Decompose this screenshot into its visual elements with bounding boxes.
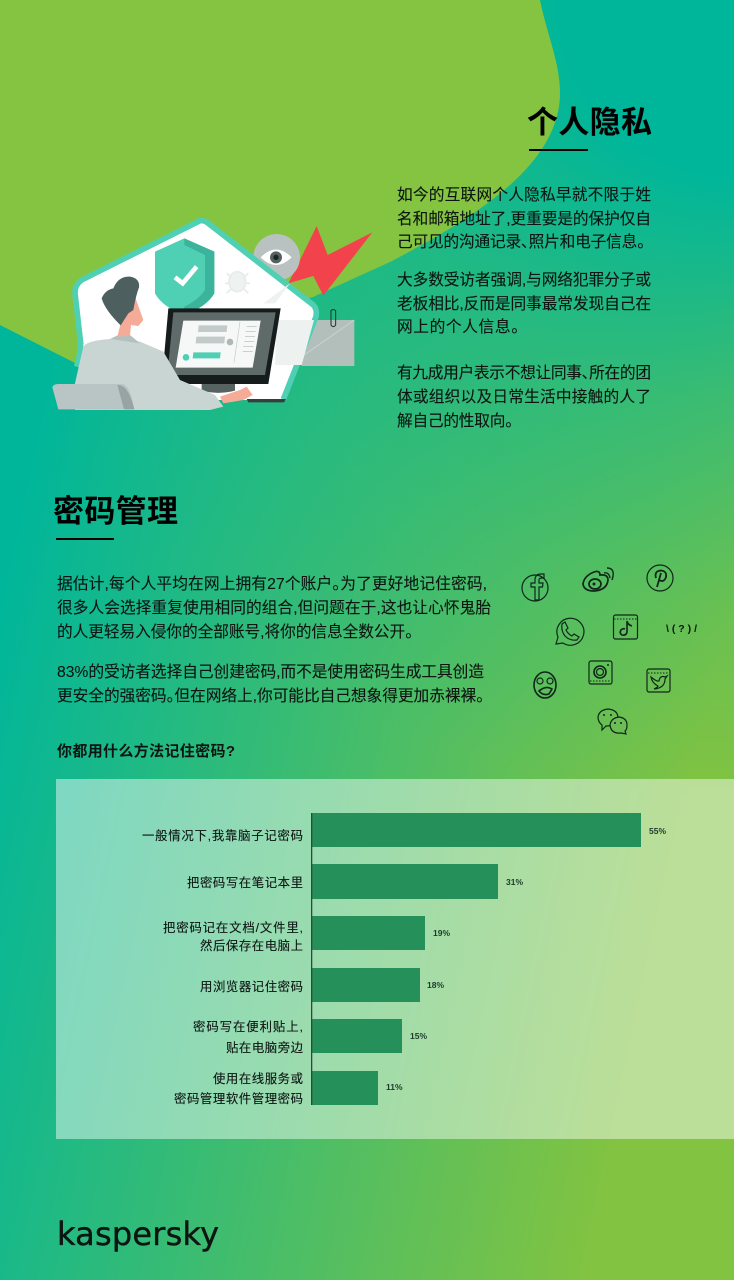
bar: brain 55%: 55% [649,826,666,836]
text block: password paragraphs: 的人更轻易入侵你的全部账号,将你的信息全数公开。 [57,623,413,641]
bar: sticky notes 15% [193,1019,427,1055]
icon: facebook [522,574,548,601]
bar: documents 19% [163,916,450,953]
bar: password manager 11%: 使用在线服务或 [213,1071,303,1086]
bar: browser 18% [200,968,444,1002]
text block: privacy paragraphs: 己可见的沟通记录、照片和电子信息。 [397,233,645,251]
panel: bar chart [56,779,734,1139]
bar: brain 55%: 一般情况下,我靠脑子记密码 [142,828,303,843]
text block: password paragraphs: 据估计,每个人平均在网上拥有27个账户。为了更好地记住密码, [57,575,487,593]
bar: sticky notes 15%: 15% [410,1031,427,1041]
person [75,277,286,410]
icon: wechat [598,709,627,734]
bar: notebook 31%: 把密码写在笔记本里 [187,875,303,890]
text block: privacy paragraphs: 解自己的性取向。 [397,412,513,430]
pentagon shield frame [75,221,316,400]
bar: notebook 31%: 31% [506,877,523,887]
text block: privacy paragraphs: 网上的个人信息。 [397,318,519,336]
social media icons [522,565,697,734]
bar: password manager 11%: 密码管理软件管理密码 [174,1091,303,1106]
logo: kaspersky: kaspersky [57,1215,219,1253]
faint bug icon [225,272,250,293]
text block: privacy paragraphs [397,186,651,430]
bar: browser 18%: 18% [427,980,444,990]
icon: pinterest [647,565,673,591]
faint envelope panel [275,320,314,365]
text block: password paragraphs: 很多人会选择重复使用相同的组合,但问题在于,这也让心怀鬼胎 [57,599,491,617]
bar: browser 18%: 用浏览器记住密码 [200,979,303,994]
bar: password manager 11% [174,1071,403,1106]
icon: eye [253,234,300,281]
title: 个人隐私: 个人隐私 [527,105,652,140]
bar: brain 55% [142,813,666,847]
bar: sticky notes 15%: 密码写在便利贴上, [193,1019,303,1034]
heading: 密码管理: 密码管理 [53,494,178,529]
illustration: person at computer inside security pentagon [52,221,372,410]
bar: documents 19%: 19% [433,928,450,938]
text block: password paragraphs: 83%的受访者选择自己创建密码,而不是使用密码生成工具创造 [57,663,484,681]
bar: documents 19%: 然后保存在电脑上 [200,938,303,953]
bar: notebook 31% [187,864,523,899]
text block: privacy paragraphs: 有九成用户表示不想让同事、所在的团 [397,364,651,382]
text block: password paragraphs [57,575,491,705]
bar: sticky notes 15%: 贴在电脑旁边 [226,1040,304,1055]
monitor [162,308,281,393]
icon: envelope with paperclip [302,309,354,366]
bar: documents 19%: 把密码记在文档/文件里, [163,920,303,935]
chart axis [311,813,312,1105]
icon: weibo [583,568,613,591]
icon: whatsapp [556,618,584,645]
text block: privacy paragraphs: 体或组织以及日常生活中接触的人了 [397,388,651,406]
icon: shrug emoticon: \(?)/ [666,623,697,635]
text block: privacy paragraphs: 老板相比,反而是同事最常发现自己在 [397,295,651,313]
chart question heading: 你都用什么方法记住密码? [57,742,235,760]
icon: twitter [647,669,670,692]
icon: green shield with check mark [155,238,214,315]
icon: tiktok [614,615,638,639]
icon: instagram [589,661,612,684]
text block: privacy paragraphs: 大多数受访者强调,与网络犯罪分子或 [397,270,651,289]
icon: red lightning bolt [288,226,372,296]
text block: privacy paragraphs: 名和邮箱地址了,更重要是的保护仅自 [397,210,651,228]
chair [52,384,134,409]
bar: password manager 11%: 11% [386,1082,403,1092]
text block: privacy paragraphs: 如今的互联网个人隐私早就不限于姓 [397,186,651,204]
text block: password paragraphs: 更安全的强密码。但在网络上,你可能比自己想象得更加赤裸裸。 [57,686,484,705]
icon: rage face [534,672,556,698]
